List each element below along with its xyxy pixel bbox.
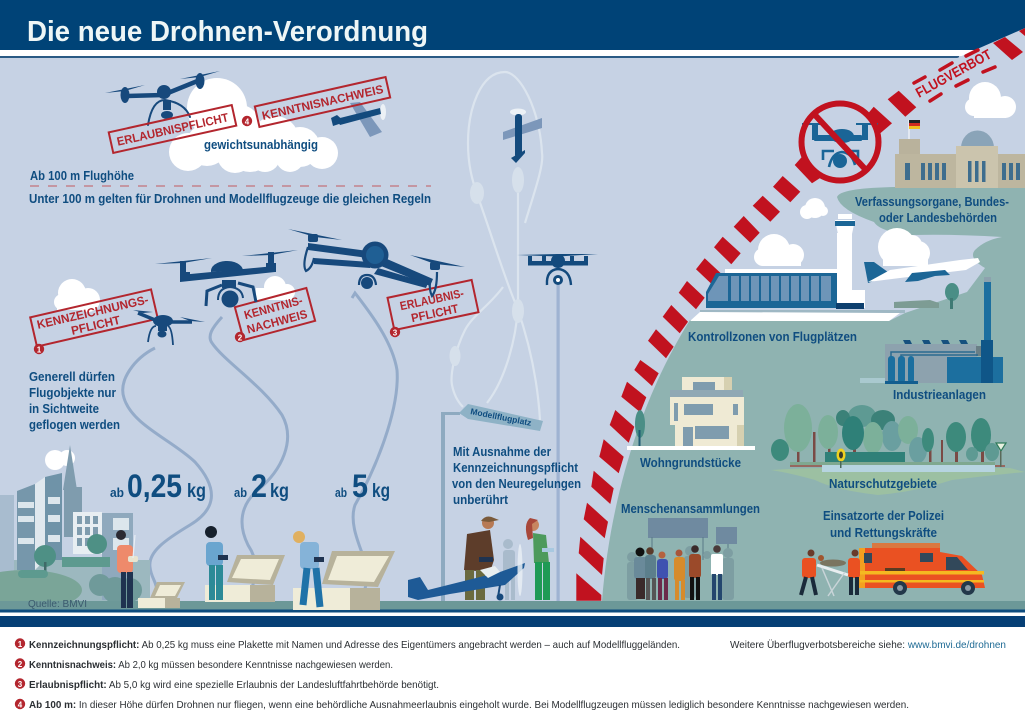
drone trails: [123, 293, 397, 596]
control tower: [835, 214, 865, 309]
label: Sichtweite: in Sichtweite: [29, 401, 99, 416]
trees near airport: [894, 283, 959, 309]
person 1: [634, 548, 647, 599]
badge 1: [34, 344, 44, 354]
label: Kontrollzonen: Kontrollzonen von Flugplätzen: [688, 329, 857, 344]
drone: above 100 m: [105, 71, 220, 125]
label: ab 5 kg: 5: [352, 468, 368, 504]
label: ab 0,25 kg: [110, 468, 206, 504]
ambulance: [859, 543, 985, 595]
trail blobs: [450, 167, 524, 366]
legend item 2: 2: [18, 660, 23, 669]
label: Wohngrundstücke: Wohngrundstücke: [640, 455, 741, 470]
badge 2: 2: [238, 334, 243, 342]
person 3: [657, 552, 668, 600]
label: Verfassungsorgane: [855, 194, 1009, 225]
label: gewichtsunabhängig: gewichtsunabhängig: [204, 137, 318, 152]
further info link: Weitere Überflugverbotsbereiche siehe: www.bmvi.de/drohnen: [730, 639, 1006, 651]
town: [0, 445, 150, 610]
person 6: [711, 545, 723, 600]
label: ab 0,25 kg: kg: [187, 481, 206, 502]
stamp: Erlaubnispflicht: ERLAUBNIS-: [399, 286, 465, 313]
person 2: [645, 547, 656, 600]
label: Quelle: Quelle: BMVI: [28, 598, 87, 610]
legend item 1: 1: [18, 640, 23, 649]
nature reserve sign: [836, 448, 846, 468]
label: Naturschutzgebiete: Naturschutzgebiete: [829, 476, 937, 491]
clouds behind drones: [54, 276, 295, 312]
crowd with signs: [627, 518, 737, 600]
cloud: beside Flugverbot: [965, 82, 1016, 118]
label: ab 2 kg: [234, 468, 289, 504]
stamp: Erlaubnispflicht: [388, 280, 478, 330]
label: Modellflug exemption: unberührt: [453, 492, 509, 507]
person 4: [674, 550, 685, 600]
box large: [293, 551, 395, 610]
person: blond: [293, 531, 324, 607]
flag sign: Modellflugplatz: Modellflugplatz: [470, 406, 532, 428]
legend item 3: Erlaubnispflicht: Ab 5,0 kg wird eine spezielle Erlaubnis der Landesluftfahrtbehörde benötigt.: [29, 679, 439, 691]
ground: [0, 601, 1025, 610]
label: Modellflug exemption: [452, 444, 581, 507]
label: ab 5 kg: kg: [372, 481, 390, 502]
badge 2: [235, 332, 245, 342]
airliner: [864, 258, 980, 283]
stamp: Erlaubnispflicht: PFLICHT: [410, 301, 460, 325]
plane: looping: [503, 108, 542, 163]
label: Ab 100 m Flughöhe: Ab 100 m Flughöhe: [30, 168, 134, 183]
Flugverbot label: FLUGVERBOT: [913, 46, 994, 101]
label: Sichtweite: Flugobjekte nur: [29, 385, 116, 400]
red and white no-fly barrier: [576, 28, 1025, 601]
cloud: top: [169, 78, 338, 173]
badge 3: 3: [393, 328, 398, 338]
badge 1: 1: [37, 346, 42, 354]
box small: [138, 582, 185, 608]
small drone: [133, 310, 205, 345]
legend item 4: 4: [18, 700, 23, 710]
header bar: [0, 0, 1025, 59]
model pilot woman: [526, 518, 554, 600]
legend item 1: Kennzeichnungspflicht: Ab 0,25 kg muss eine Plakette mit Namen und Adresse des Eigentümers angebracht werden – auch auf Modellfluggeländen.: [29, 639, 680, 651]
Reichstag building: [895, 120, 1025, 188]
label: Einsatzorte: Einsatzorte der Polizei: [823, 508, 944, 523]
restricted green area: [602, 187, 1025, 601]
label: ab 0,25 kg: ab: [110, 485, 124, 500]
large drone: [288, 229, 465, 296]
legend item 3: 3: [18, 680, 23, 689]
label: Sichtweite: geflogen werden: [29, 417, 120, 432]
hexacopter on mast: [517, 254, 598, 601]
model flight trails: [452, 72, 542, 420]
label: ab 2 kg: kg: [270, 481, 289, 502]
model plane: [408, 544, 525, 600]
label: Sichtweite: [29, 369, 120, 432]
badge 4: [242, 116, 252, 126]
airport with tower: [690, 214, 905, 321]
label: Sichtweite: Generell dürfen: [29, 369, 115, 384]
triangle sign: [996, 443, 1006, 467]
box medium: [205, 555, 285, 602]
silhouette person: [503, 539, 515, 600]
icon: drone prohibited: [799, 101, 881, 183]
legend: [15, 638, 1006, 711]
label: unter 100 m: Unter 100 m gelten für Drohnen und Modellflugzeuge die gleichen Regeln: [29, 191, 431, 206]
stamp: Kenntnisnachweis: [235, 288, 315, 340]
person: orange shirt: [116, 530, 138, 608]
person 5: [689, 545, 701, 600]
stamp: Erlaubnispflicht above 100 m: ERLAUBNISPFLICHT: [115, 110, 230, 149]
person: teal trousers: [205, 526, 228, 600]
label: Industrieanlagen: Industrieanlagen: [893, 387, 986, 402]
plane: above 100 m: [331, 102, 386, 137]
stamp: Kenntnisnachweis: NACHWEIS: [245, 307, 309, 337]
nature reserve: [771, 404, 1025, 495]
residential house: [627, 377, 755, 450]
label: Modellflug exemption: von den Neuregelungen: [452, 476, 581, 491]
legend item 2: Kenntnisnachweis: Ab 2,0 kg müssen besondere Kenntnisse nachgewiesen werden.: [29, 659, 393, 671]
sky background: [0, 56, 1025, 611]
label: Verfassungsorgane: oder Landesbehörden: [879, 210, 997, 225]
stamp: Kennzeichnungspflicht: [30, 289, 158, 347]
paramedics with stretcher: [801, 550, 860, 596]
label: ab 5 kg: ab: [335, 485, 347, 500]
badge 4: 4: [245, 118, 250, 126]
German flag: [909, 120, 920, 129]
label: Einsatzorte: [823, 508, 944, 540]
industrial plant: [860, 277, 1003, 384]
label: Modellflug exemption: Kennzeichnungspflicht: [453, 460, 579, 475]
label: ab 5 kg: [335, 468, 390, 504]
model pilot: [464, 517, 499, 600]
label: ab 2 kg: ab: [234, 485, 247, 500]
label: Menschenansammlungen: Menschenansammlungen: [621, 501, 760, 516]
clouds over restricted area: [754, 198, 930, 266]
badge 3: [390, 327, 400, 338]
legend item 4: Ab 100 m: In dieser Höhe dürfen Drohnen nur fliegen, wenn eine behördliche Ausnahmeerlaubnis eingeholt wurde. Bei Modellflugzeugen müssen lediglich besondere Kenntnisse nachgewiesen werden.: [29, 699, 909, 711]
stamp: Kenntnisnachweis: KENNTNIS-: [243, 293, 304, 322]
label: ab 2 kg: 2: [251, 468, 267, 504]
stamp: Kennzeichnungspflicht: PFLICHT: [70, 313, 122, 338]
label: Einsatzorte: und Rettungskräfte: [830, 525, 937, 540]
stamp: Kennzeichnungspflicht: KENNZEICHNUNGS-: [36, 293, 150, 332]
middle drone: [155, 250, 298, 308]
title: Die neue Drohnen-Verordnung: [27, 16, 428, 48]
label: ab 0,25 kg: 0,25: [127, 468, 182, 504]
label: Modellflug exemption: Mit Ausnahme der: [453, 444, 551, 459]
flag sign: Modellflugplatz: [441, 404, 543, 601]
stamp: Kenntnisnachweis above 100 m: KENNTNISNACHWEIS: [261, 82, 385, 123]
